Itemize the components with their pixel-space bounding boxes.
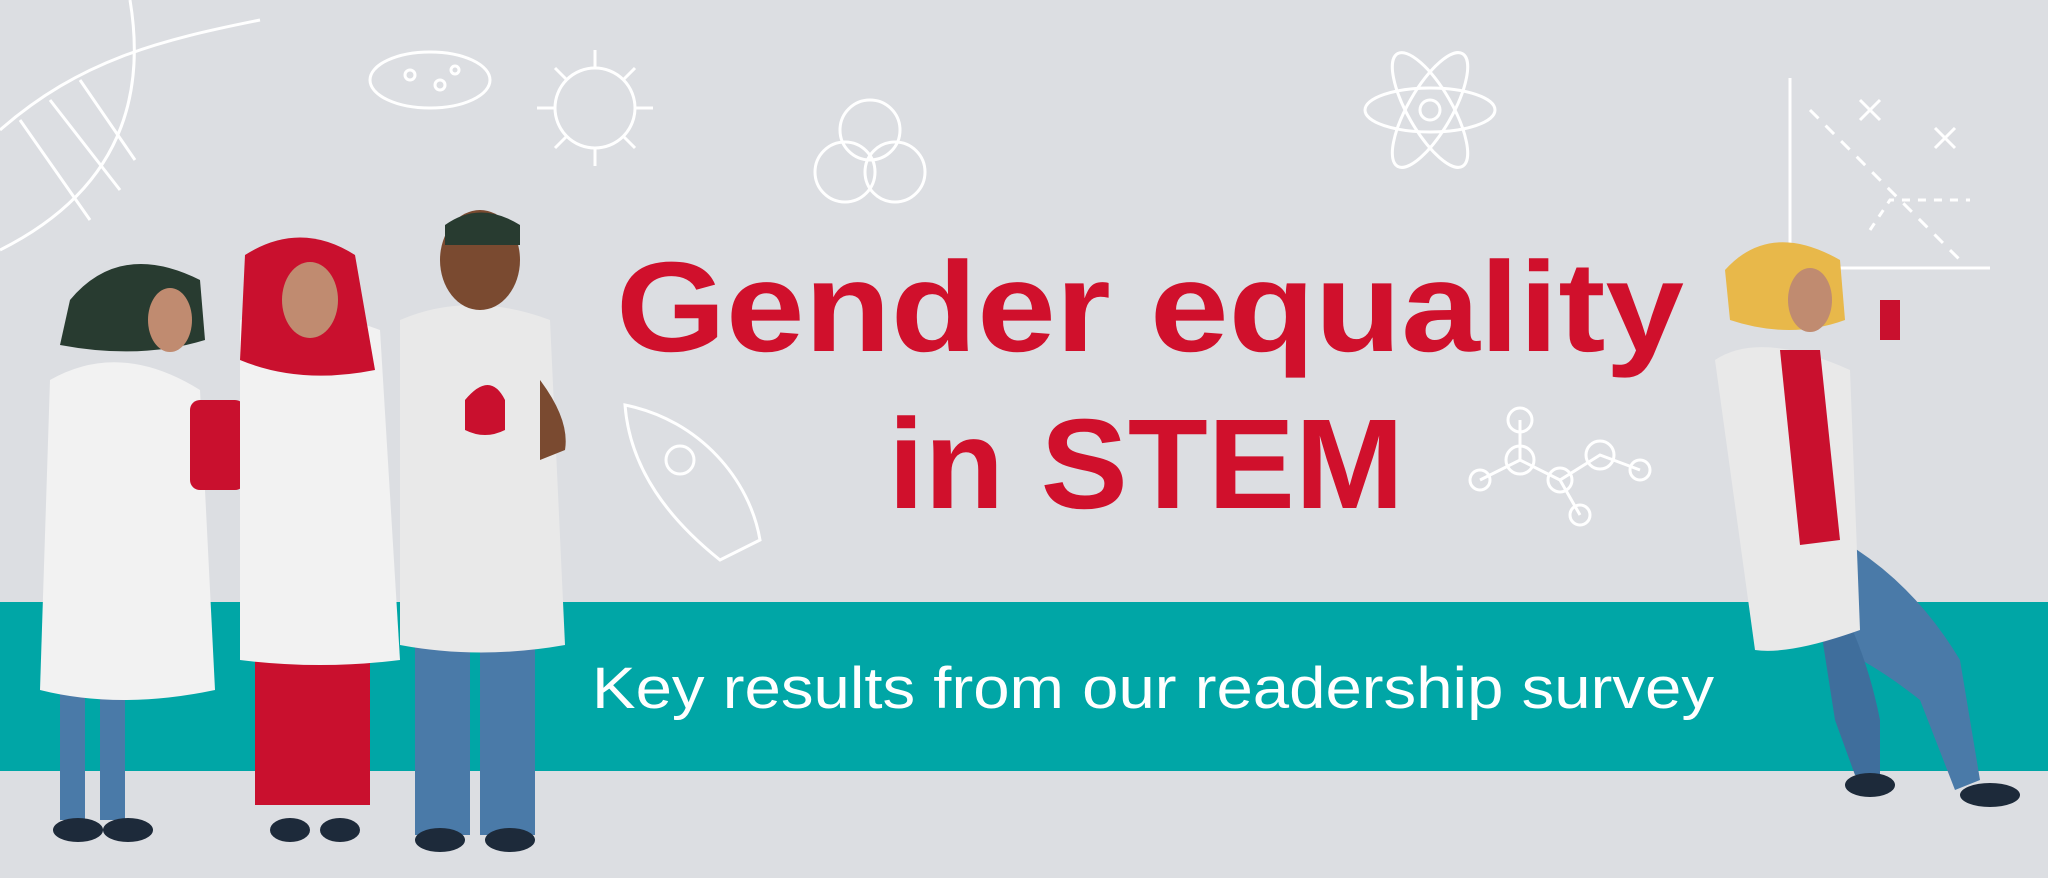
person: woman leaning with test tube bbox=[1715, 242, 2020, 807]
icon: rocket bbox=[625, 405, 760, 560]
decorative icons bbox=[0, 0, 1990, 560]
icon: graph bbox=[1790, 78, 1990, 268]
icon: atom bbox=[1365, 43, 1495, 177]
icon: dna helix bbox=[0, 0, 260, 250]
title: Gender equality bbox=[616, 236, 1684, 379]
icon: bacteria bbox=[370, 52, 490, 108]
person: man with flask bbox=[400, 210, 566, 852]
subtitle: Key results from our readership survey bbox=[592, 656, 1714, 721]
icon: virus bbox=[537, 50, 653, 166]
title: in STEM bbox=[888, 393, 1404, 536]
title bbox=[616, 236, 1684, 536]
teal band bbox=[0, 602, 2048, 771]
person: woman with microscope bbox=[40, 264, 245, 842]
person: woman in hijab bbox=[240, 238, 400, 842]
icon: biohazard bbox=[815, 100, 925, 202]
icon: molecule bbox=[1470, 408, 1650, 525]
